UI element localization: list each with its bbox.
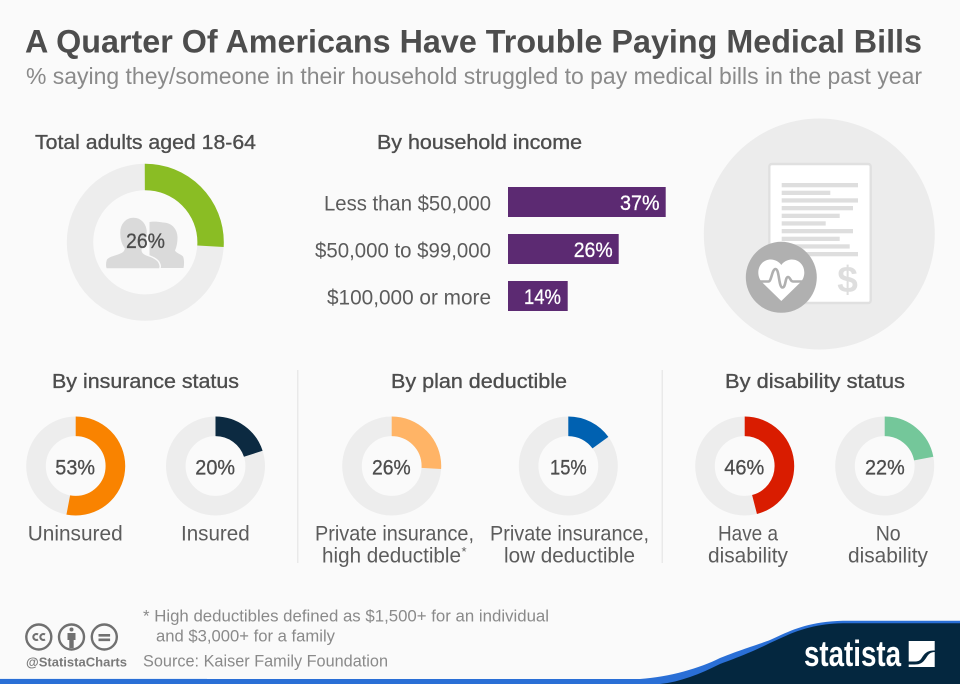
donut: total adults 26% bbox=[80, 177, 211, 308]
bar: 100,000 or more: $100,000 or more bbox=[327, 286, 491, 310]
donut: have a disability 46% bbox=[705, 426, 788, 567]
donut: have a disability 46%: 46% bbox=[724, 456, 764, 479]
value: 26%: 26% bbox=[126, 230, 165, 253]
illustration: medical bill bbox=[704, 118, 935, 350]
handle: @StatistaCharts bbox=[26, 656, 127, 670]
donut: insured 20% bbox=[176, 426, 255, 545]
donut: low deductible 15%: 15% bbox=[550, 456, 587, 479]
donut: high deductible 26%: high deductible bbox=[322, 544, 461, 567]
bar: less than 50,000: Less than $50,000 bbox=[324, 192, 491, 216]
heading: total adults: Total adults aged 18-64 bbox=[35, 131, 256, 154]
donut: uninsured 53%: 53% bbox=[55, 456, 95, 479]
bar: less than 50,000 bbox=[324, 187, 666, 217]
donut: no disability 22%: 22% bbox=[865, 456, 905, 479]
donut: low deductible 15%: low deductible bbox=[504, 544, 635, 567]
footer band bbox=[0, 621, 960, 684]
heading: plan deductible: By plan deductible bbox=[391, 370, 567, 393]
bar: 50,000 to 99,000 bbox=[315, 234, 619, 264]
icon: document: $ bbox=[837, 259, 858, 300]
donut: insured 20%: 20% bbox=[195, 456, 235, 479]
bar: 50,000 to 99,000: 26% bbox=[574, 239, 613, 262]
panel: plan deductible bbox=[315, 370, 649, 567]
bar: less than 50,000: 37% bbox=[620, 192, 660, 215]
icon: document bbox=[769, 164, 871, 303]
footnote: and $3,000+ for a family bbox=[156, 628, 336, 646]
donut: uninsured 53%: Uninsured bbox=[28, 522, 123, 545]
footnote bbox=[143, 608, 549, 646]
donut: high deductible 26%: * bbox=[462, 544, 467, 559]
icon: two people bbox=[105, 217, 184, 269]
bar: 50,000 to 99,000: $50,000 to $99,000 bbox=[315, 240, 491, 262]
bar: 100,000 or more bbox=[327, 281, 568, 311]
icons: creative commons bbox=[26, 624, 117, 650]
panel: household income bbox=[315, 131, 666, 311]
donut: no disability 22% bbox=[845, 426, 928, 567]
heading: disability status: By disability status bbox=[725, 370, 905, 393]
donut: no disability 22%: No bbox=[876, 522, 901, 545]
subtitle: % saying they/someone in their household struggled to pay medical bills in the past year bbox=[26, 63, 922, 89]
donut: have a disability 46%: Have a bbox=[718, 522, 778, 545]
heading: insurance status: By insurance status bbox=[52, 370, 239, 393]
footnote: * High deductibles defined as $1,500+ for an individual bbox=[143, 608, 549, 626]
heading: household income: By household income bbox=[377, 131, 582, 154]
bar: 100,000 or more: 14% bbox=[524, 286, 561, 309]
panel: total adults bbox=[35, 131, 256, 308]
title: A Quarter Of Americans Have Trouble Paying Medical Bills bbox=[25, 24, 922, 60]
icon: heart with pulse bbox=[746, 242, 817, 313]
donut: uninsured 53% bbox=[28, 426, 123, 545]
donut: high deductible 26% bbox=[315, 426, 474, 567]
source: Source: Kaiser Family Foundation bbox=[143, 653, 388, 671]
donut: have a disability 46%: disability bbox=[708, 544, 788, 567]
donut: no disability 22%: disability bbox=[848, 544, 928, 567]
donut: insured 20%: Insured bbox=[181, 522, 250, 545]
panel: insurance status bbox=[28, 370, 255, 545]
donut: low deductible 15% bbox=[490, 426, 649, 567]
logo: statista: statista bbox=[804, 633, 902, 674]
donut: low deductible 15%: Private insurance, bbox=[490, 522, 649, 545]
donut: high deductible 26%: Private insurance, bbox=[315, 522, 474, 545]
donut: high deductible 26%: 26% bbox=[372, 456, 411, 479]
panel: disability status bbox=[705, 370, 928, 567]
